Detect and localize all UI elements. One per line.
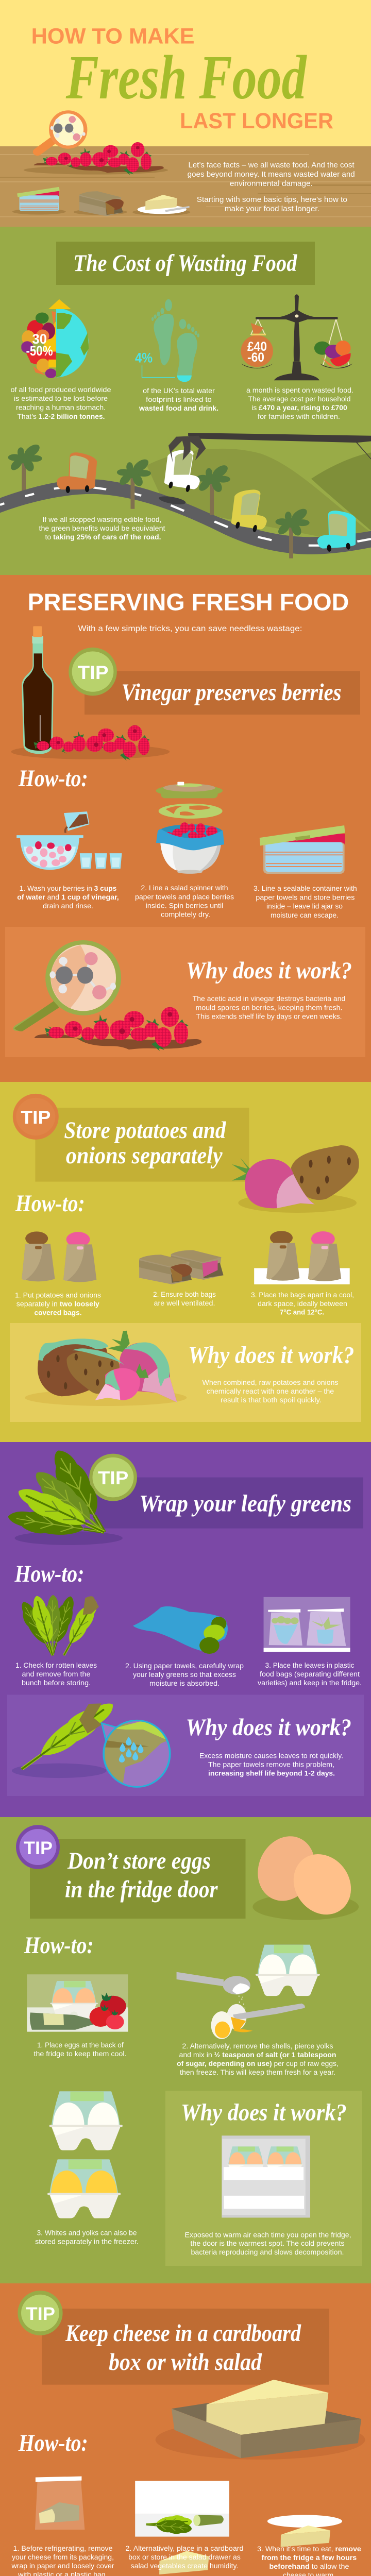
steps text: box or store in the salad drawer as	[128, 2553, 241, 2561]
steps text: of water and 1 cup of vinegar,	[17, 893, 119, 901]
panel: why does it work (greens)	[7, 1695, 364, 1796]
how-to heading: How-to:	[15, 1190, 85, 1217]
steps text: 2. Alternatively, remove the shells, pierce yolks	[182, 2042, 333, 2050]
stat: 4%: 4%	[135, 350, 153, 366]
icon: cheese on plate	[132, 195, 190, 215]
heading banner: the cost of wasting food: The Cost of Wasting Food	[73, 250, 298, 277]
icon: bunch of leafy greens	[6, 1446, 123, 1545]
explanation text	[184, 2231, 351, 2256]
icon: vinegar bottle and berries	[11, 626, 170, 760]
section: title header	[0, 0, 371, 227]
step 2 illustration: ventilated bags	[139, 1250, 224, 1284]
how-to heading: How-to:	[18, 2430, 88, 2456]
text: monthly cost: for families with children.	[258, 413, 340, 420]
text: cars off the road: If we all stopped wasting edible food,	[42, 516, 162, 523]
steps text: 3. Place the bags apart in a cool,	[251, 1291, 354, 1299]
text: cars off the road: to taking 25% of cars off the road.	[45, 533, 161, 541]
tip banner: potatoes and onions: Store potatoes and	[64, 1117, 227, 1144]
stat: 30-50%	[26, 331, 53, 359]
icon: magnifier with molecule	[38, 112, 86, 152]
steps text: 3. Place the leaves in plastic	[265, 1662, 355, 1669]
steps text	[17, 884, 357, 919]
badge: tip	[89, 1454, 137, 1501]
section: tip 4 eggs	[0, 1817, 371, 2283]
steps text: 2. Ensure both bags	[153, 1291, 216, 1298]
steps text: your cheese from its packaging,	[12, 2553, 114, 2561]
tip banner: vinegar	[85, 671, 360, 715]
steps text	[11, 2545, 361, 2576]
steps text: 7°C and 12°C.	[280, 1309, 324, 1316]
explanation text: chemically react with one another – the	[207, 1387, 334, 1395]
text: uk water footprint	[139, 387, 218, 412]
steps text: from the fridge a few hours	[262, 2554, 357, 2562]
steps text: 1. Check for rotten leaves	[15, 1662, 97, 1669]
steps text: 2. Line a salad spinner with	[141, 884, 228, 892]
steps text: 2. Alternatively, place in a cardboard	[126, 2545, 243, 2552]
steps text: moisture can escape.	[271, 911, 339, 919]
step 3 illustration: bags in cool dark space	[254, 1231, 350, 1284]
step 1 illustration: bowl of berries in vinegar water	[16, 811, 122, 870]
icon: mouldy berries	[35, 1007, 201, 1051]
icon: magnifier and molecule	[13, 942, 119, 1031]
illustration: road with cars, crane and palms	[0, 433, 371, 558]
steps text: of sugar, depending on use) per cup of raw eggs,	[177, 2060, 339, 2067]
explanation text: mould spores on berries, keeping them fresh.	[196, 1004, 342, 1012]
text: all food produced: reaching a human stomach.	[16, 404, 106, 411]
explanation text	[202, 1379, 339, 1404]
steps text: moisture is absorbed.	[149, 1680, 220, 1687]
step 3 illustration: cheese on plate	[267, 2515, 342, 2547]
explanation text	[199, 1752, 343, 1777]
explanation text: the door is the warmest spot. The cold prevents	[191, 2240, 345, 2247]
icon: onion and potato	[232, 1145, 359, 1213]
text: cars off the road	[39, 516, 165, 541]
steps text: paper towels and store berries	[256, 894, 355, 902]
section: the cost of wasting food	[0, 227, 371, 575]
steps text: 3. Line a sealable container with	[254, 885, 357, 892]
step 3 illustration: whites and yolks cartons	[47, 2091, 123, 2218]
steps text: 3. When it’s time to eat, remove	[257, 2545, 361, 2553]
icon: paper bag with bread	[74, 191, 127, 216]
heading: why does it work: Why does it work?	[188, 1342, 354, 1369]
steps text: inside. Spin berries until	[146, 902, 223, 910]
stat: £40-60	[247, 340, 267, 365]
explanation text: increasing shelf life beyond 1-2 days.	[208, 1769, 335, 1777]
tip banner: leafy greens: Wrap your leafy greens	[139, 1490, 351, 1517]
icon: water footprints	[142, 299, 199, 382]
icon: balance scale with money and food	[241, 294, 352, 380]
icon: rotting leaf with moisture close-up	[12, 1695, 171, 1787]
tip banner: vinegar: Vinegar preserves berries	[122, 679, 342, 706]
steps text: varieties) and keep in the fridge.	[258, 1679, 362, 1687]
step 1 illustration: check leaves	[15, 1595, 103, 1658]
text: all food produced: is estimated to be lost before	[14, 395, 108, 402]
wood table panel	[0, 146, 371, 227]
tip banner: leafy greens	[94, 1478, 363, 1529]
icon: fridge door with eggs	[222, 2136, 310, 2217]
panel: why does it work (vinegar)	[5, 927, 365, 1057]
how-to heading: How-to:	[24, 1932, 94, 1959]
text: uk water footprint: wasted food and drink.	[139, 404, 218, 412]
text: cars off the road: the green benefits would be equivalent	[39, 524, 165, 532]
step 2 illustration: cheese in salad drawer	[135, 2481, 229, 2574]
text: monthly cost: The average cost per household	[248, 395, 350, 403]
explanation text: The paper towels remove this problem,	[208, 1761, 334, 1769]
explanation text: Excess moisture causes leaves to rot quickly.	[199, 1752, 343, 1760]
steps text: and mix in ½ teaspoon of salt (or 1 tablespoon	[179, 2051, 336, 2059]
badge: tip: TIP	[98, 1467, 128, 1488]
stat: 30-50%: -50%	[26, 343, 53, 359]
steps text: food bags (separating different	[260, 1670, 360, 1678]
text: all food produced: of all food produced worldwide	[10, 386, 111, 394]
text: monthly cost: is £470 a year, rising to £700	[251, 404, 347, 412]
steps text: dark space, ideally between	[258, 1300, 347, 1308]
section: tip 3 leafy greens	[0, 1442, 371, 1817]
title: last longer: LAST LONGER	[180, 109, 333, 133]
explanation text: bacteria reproducing and slows decomposition.	[191, 2248, 344, 2256]
tip banner: eggs	[30, 1839, 245, 1919]
section: preserving fresh food, tip 1 vinegar	[0, 575, 371, 1082]
steps text: and remove from the	[22, 1670, 91, 1678]
steps text: 1. Before refrigerating, remove	[13, 2545, 112, 2552]
explanation text: result is that both spoil quickly.	[221, 1396, 322, 1404]
step 3 text	[35, 2229, 139, 2245]
steps text: paper towels and place berries	[135, 893, 234, 901]
badge: tip	[69, 648, 117, 696]
badge: tip	[16, 1825, 60, 1869]
panel: why does it work (potatoes)	[10, 1323, 361, 1422]
explanation text: Exposed to warm air each time you open the fridge,	[184, 2231, 351, 2239]
panel: why does it work (eggs)	[165, 2091, 362, 2266]
step 2 illustration: leaves in paper towel	[133, 1606, 228, 1654]
tip banner: cheese	[42, 2309, 329, 2385]
steps text: inside – leave lid ajar so	[266, 903, 343, 910]
badge: tip: TIP	[26, 2304, 55, 2324]
steps text: 1. Place eggs at the back of	[37, 2041, 124, 2049]
stat: £40-60: £40	[247, 340, 267, 354]
icon: berry container	[12, 187, 66, 215]
steps text: then freeze. This will keep them fresh for a year.	[180, 2069, 335, 2076]
step 1 illustration: cheese in plastic bag	[35, 2477, 85, 2530]
how-to heading: How-to:	[14, 1561, 85, 1587]
step 3 illustration: sealable container	[260, 825, 345, 874]
badge: tip	[13, 1094, 59, 1140]
stat: £40-60: -60	[247, 350, 264, 365]
steps text: 1. Put potatoes and onions	[15, 1292, 101, 1299]
subheading: With a few simple tricks, you can save needless wastage:	[78, 624, 302, 633]
text: monthly cost	[246, 386, 353, 420]
badge: tip: TIP	[21, 1107, 50, 1128]
steps text: bunch before storing.	[22, 1679, 91, 1687]
title: how to make: HOW TO MAKE	[31, 24, 195, 48]
intro text: environmental damage.	[230, 180, 313, 188]
steps text: the fridge to keep them cool.	[34, 2050, 127, 2058]
icon: rotting berries	[24, 142, 168, 175]
section: tip 5 cheese	[0, 2283, 371, 2576]
section: tip 2 potatoes and onions	[0, 1082, 371, 1442]
steps text	[15, 1291, 354, 1317]
explanation text	[193, 995, 345, 1020]
steps text: salad vegetables create humidity.	[131, 2562, 238, 2570]
heading: why does it work: Why does it work?	[185, 1714, 351, 1741]
steps text: drain and rinse.	[43, 902, 93, 910]
intro text: Starting with some basic tips, here’s how to	[197, 196, 347, 204]
tip banner: eggs: in the fridge door	[65, 1876, 218, 1903]
badge: tip	[18, 2291, 63, 2335]
icon: cheese in cardboard box	[156, 2380, 365, 2460]
icon: mouldy potatoes and onions	[25, 1331, 187, 1406]
intro text	[188, 161, 355, 213]
step 3 text: 3. Whites and yolks can also be	[37, 2229, 137, 2237]
steps text: 2. Using paper towels, carefully wrap	[125, 1662, 244, 1670]
steps text	[15, 1662, 362, 1687]
heading: why does it work: Why does it work?	[181, 2099, 347, 2126]
step 3 illustration: leaves in plastic bags in fridge	[264, 1597, 350, 1652]
tip banner: cheese: Keep cheese in a cardboard	[65, 2320, 301, 2347]
step 3 text: stored separately in the freezer.	[35, 2238, 139, 2245]
intro text: goes beyond money. It means wasted water and	[188, 171, 355, 179]
icon: two eggs	[251, 1832, 359, 1920]
steps text: separately in two loosely	[16, 1300, 99, 1308]
explanation text: This extends shelf life by days or even weeks.	[196, 1013, 342, 1020]
text: uk water footprint: of the UK’s total water	[143, 387, 215, 395]
step 1 illustration: two loose bags	[22, 1231, 96, 1282]
steps text: are well ventilated.	[154, 1299, 215, 1307]
steps text: wrap in paper and loosely cover	[11, 2562, 114, 2570]
intro text: make your food last longer.	[225, 205, 319, 213]
steps text: 1. Wash your berries in 3 cups	[20, 885, 116, 892]
how-to heading: How-to:	[18, 765, 88, 792]
steps text: your leafy greens so that excess	[133, 1671, 236, 1679]
heading banner: the cost of wasting food	[56, 242, 315, 285]
explanation text: The acetic acid in vinegar destroys bacteria and	[193, 995, 345, 1003]
steps text: completely dry.	[161, 911, 210, 918]
steps text: beforehand to allow the	[269, 2563, 349, 2570]
steps text: covered bags.	[34, 1309, 81, 1317]
tip banner: potatoes and onions: onions separately	[66, 1142, 223, 1169]
stat: 30-50%: 30	[32, 331, 47, 347]
badge: tip: TIP	[78, 662, 109, 683]
step 2 illustration: carton, spoon of salt and knife on egg	[177, 1945, 320, 2039]
explanation text: When combined, raw potatoes and onions	[202, 1379, 339, 1386]
intro text: Let’s face facts – we all waste food. And the cost	[189, 161, 355, 170]
tip banner: cheese: box or with salad	[109, 2349, 262, 2376]
heading: preserving fresh food: PRESERVING FRESH FOOD	[28, 588, 349, 615]
text: all food produced: That’s 1.2-2 billion tonnes.	[18, 413, 105, 420]
heading: why does it work: Why does it work?	[186, 957, 352, 984]
title: fresh food: Fresh Food	[65, 43, 307, 112]
icon: globe and food	[21, 299, 89, 378]
text: monthly cost: a month is spent on wasted food.	[246, 386, 353, 394]
text: all food produced	[10, 386, 111, 420]
tip banner: eggs: Don’t store eggs	[67, 1848, 211, 1874]
text: uk water footprint: footprint is linked to	[146, 396, 212, 403]
step 1 illustration: eggs at back of fridge	[27, 1974, 128, 2032]
badge: tip: TIP	[24, 1838, 53, 1858]
steps text	[34, 2041, 339, 2076]
step 2 illustration: salad spinner	[156, 782, 224, 874]
tip banner: potatoes and onions	[35, 1108, 249, 1182]
